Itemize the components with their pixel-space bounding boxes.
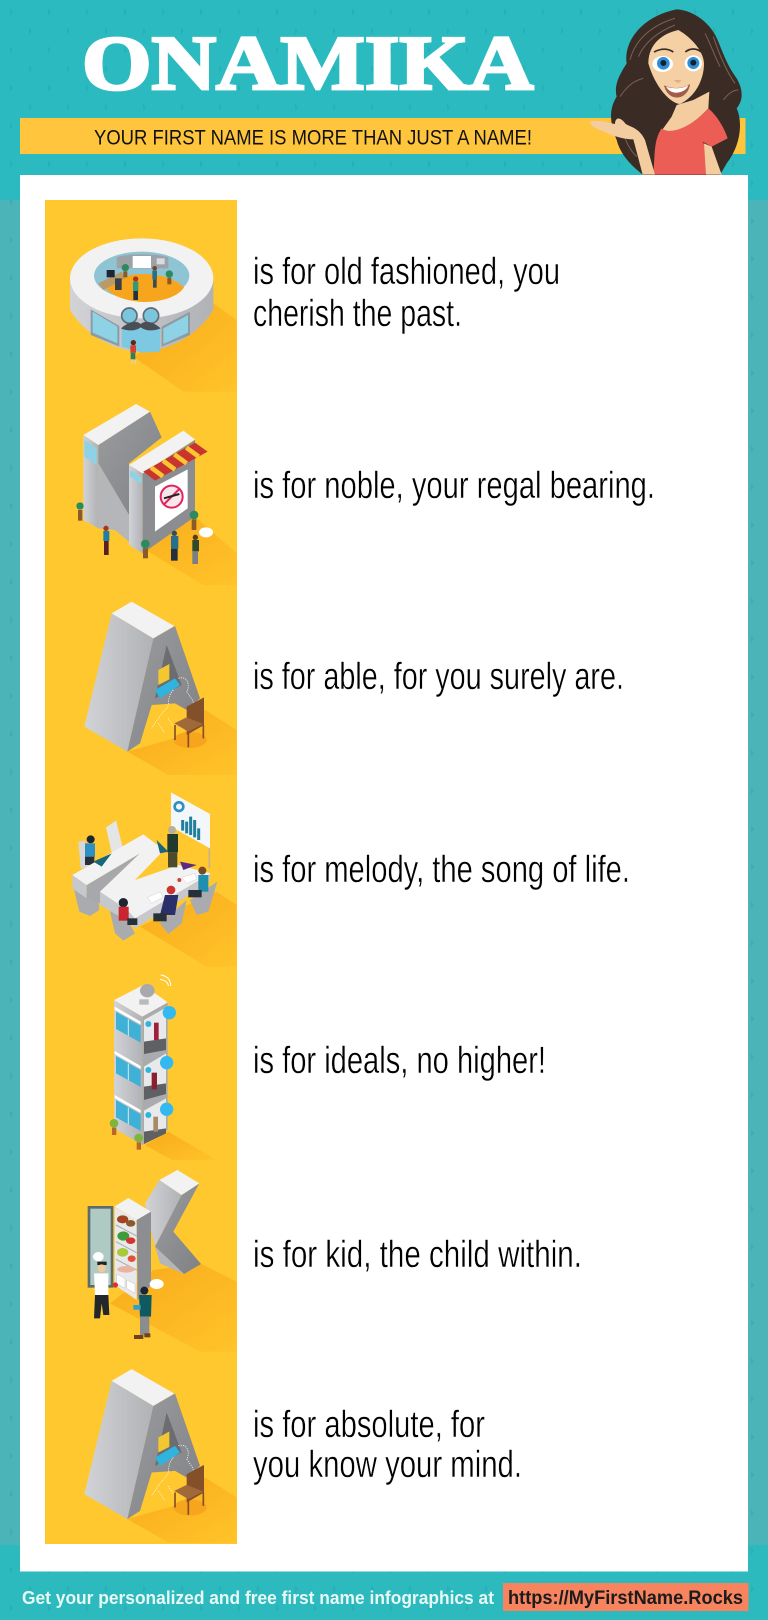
windows and balconies bbox=[115, 1007, 166, 1144]
text: K line: is for kid, the child within. bbox=[253, 1234, 582, 1276]
figure: inner person green bbox=[133, 276, 138, 300]
character: woman presenting bbox=[590, 9, 742, 175]
figure: standing presenter bbox=[167, 826, 178, 867]
text: A line: is for able, for you surely are. bbox=[253, 656, 624, 698]
text: O line: cherish the past. bbox=[253, 293, 462, 335]
figure: right person bbox=[188, 867, 208, 897]
text: final A line bbox=[253, 1404, 522, 1486]
text: O line bbox=[253, 251, 560, 335]
title: ONAMIKA bbox=[82, 22, 533, 107]
text: M line: is for melody, the song of life. bbox=[253, 849, 630, 891]
speech bubble bbox=[199, 527, 213, 537]
text: N line: is for noble, your regal bearing. bbox=[253, 465, 655, 507]
icon: letter K fridge bbox=[88, 1170, 237, 1352]
footer url badge: https://MyFirstName.Rocks bbox=[508, 1588, 743, 1609]
subtitle banner bbox=[20, 118, 746, 154]
figures: people near N bbox=[103, 526, 199, 564]
icon: letter A building bbox=[84, 602, 237, 775]
figure: top left person bbox=[85, 835, 95, 865]
fridge contents bbox=[113, 1215, 137, 1293]
speech bubble bbox=[150, 1279, 164, 1289]
footer bbox=[22, 1583, 748, 1611]
text: final A line: you know your mind. bbox=[253, 1444, 522, 1486]
subtitle banner: YOUR FIRST NAME IS MORE THAN JUST A NAME! bbox=[94, 126, 532, 150]
figure: inner person teal bbox=[152, 266, 157, 288]
plants beside N bbox=[76, 502, 198, 558]
figure: person in red at entrance bbox=[130, 340, 136, 365]
figure: customer bbox=[133, 1287, 152, 1339]
yellow image column bbox=[45, 200, 237, 1544]
plants bbox=[110, 1119, 143, 1150]
text: I line: is for ideals, no higher! bbox=[253, 1040, 546, 1082]
icon: letter O ring building bbox=[70, 238, 237, 392]
text: final A line: is for absolute, for bbox=[253, 1404, 485, 1446]
figure: chef bbox=[93, 1252, 109, 1318]
footer text: Get your personalized and free first name infographics at bbox=[22, 1588, 494, 1608]
figure: woman in red bbox=[119, 898, 137, 925]
icon: letter N building bbox=[76, 404, 237, 585]
figure: person in navy bbox=[153, 886, 178, 921]
icon: letter M meeting table bbox=[72, 792, 237, 967]
icon: letter I tower bbox=[110, 975, 217, 1160]
icon: letter A building repeated bbox=[84, 1369, 237, 1542]
satellite dish bbox=[139, 975, 171, 1005]
text: O line: is for old fashioned, you bbox=[253, 251, 560, 293]
